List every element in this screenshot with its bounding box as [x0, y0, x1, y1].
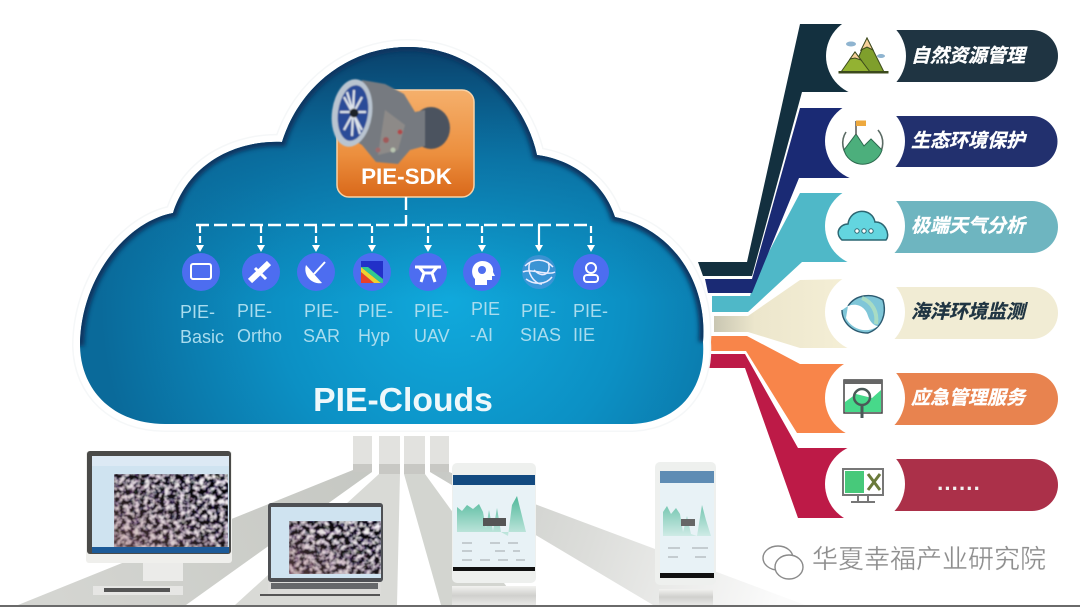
device: phone — [655, 462, 716, 605]
text: natural resources: 自然资源管理 — [911, 45, 1028, 67]
row: ocean — [825, 272, 1058, 352]
text: ocean: 海洋环境监测 — [911, 301, 1028, 323]
ribbon: emergency — [709, 336, 850, 433]
icon: PIE-IIE — [573, 254, 609, 290]
module labels — [180, 299, 608, 347]
icon: jet engine — [327, 77, 450, 164]
icon: PIE-SIAS — [522, 255, 556, 289]
module labels: PIE- — [358, 301, 393, 321]
application rows — [825, 16, 1058, 524]
row: emergency — [825, 358, 1058, 438]
icon: PIE-Hyp — [353, 253, 391, 291]
watermark — [763, 544, 1046, 579]
module icons — [182, 253, 609, 291]
icon: cloud — [838, 211, 888, 240]
icon: computer — [843, 469, 883, 502]
module labels: UAV — [414, 326, 450, 346]
module labels: IIE — [573, 325, 595, 345]
text: ecology: 生态环境保护 — [911, 130, 1028, 152]
text: emergency: 应急管理服务 — [911, 387, 1027, 409]
SDK box — [327, 77, 474, 197]
module labels: Hyp — [358, 326, 390, 346]
module labels: PIE- — [573, 301, 608, 321]
module labels: PIE- — [237, 301, 272, 321]
connector ribbons to application rows — [698, 24, 850, 518]
module labels: -AI — [470, 325, 493, 345]
icon: PIE-SAR — [297, 253, 335, 291]
icon: PIE-Basic — [182, 253, 220, 291]
icon: PIE-AI — [463, 253, 501, 291]
row: more — [825, 444, 1058, 524]
module labels: Ortho — [237, 326, 282, 346]
bottom beams — [18, 436, 805, 605]
PIE-Clouds title: PIE-Clouds — [313, 381, 493, 419]
device: desktop monitor — [86, 451, 232, 595]
icon: PIE-UAV — [409, 253, 447, 291]
icon: wave — [842, 296, 884, 333]
ribbon: more — [702, 354, 850, 518]
dashed connectors — [196, 197, 595, 252]
watermark text: 华夏幸福产业研究院 — [812, 544, 1046, 574]
module labels: PIE- — [180, 302, 215, 322]
bottom edge line — [0, 605, 1080, 607]
row: ecology — [825, 101, 1058, 181]
devices — [86, 451, 716, 605]
module labels: PIE — [471, 299, 500, 319]
device: tablet phone — [452, 463, 536, 605]
icon: wechat — [763, 546, 803, 579]
module labels: PIE- — [414, 301, 449, 321]
module labels: SIAS — [520, 325, 561, 345]
ribbon: natural resources — [698, 24, 850, 276]
device: laptop — [260, 503, 383, 596]
icon: mountains — [839, 38, 888, 73]
ribbon: ecology — [705, 108, 850, 293]
cloud panel — [80, 47, 703, 424]
module labels: Basic — [180, 327, 224, 347]
ribbon: extreme weather — [712, 193, 850, 312]
row: natural resources — [826, 16, 1058, 96]
text: extreme weather: 极端天气分析 — [911, 215, 1027, 237]
icon: flag and hills — [843, 120, 883, 164]
icon: magnifier on chart — [844, 380, 882, 418]
module labels: PIE- — [304, 301, 339, 321]
module labels: PIE- — [521, 301, 556, 321]
ribbon: ocean — [714, 279, 850, 348]
module labels: SAR — [303, 326, 340, 346]
icon: PIE-Ortho — [242, 253, 280, 291]
SDK label: PIE-SDK — [361, 164, 452, 189]
text: dots: ...... — [937, 470, 981, 495]
row: extreme weather — [825, 186, 1058, 266]
